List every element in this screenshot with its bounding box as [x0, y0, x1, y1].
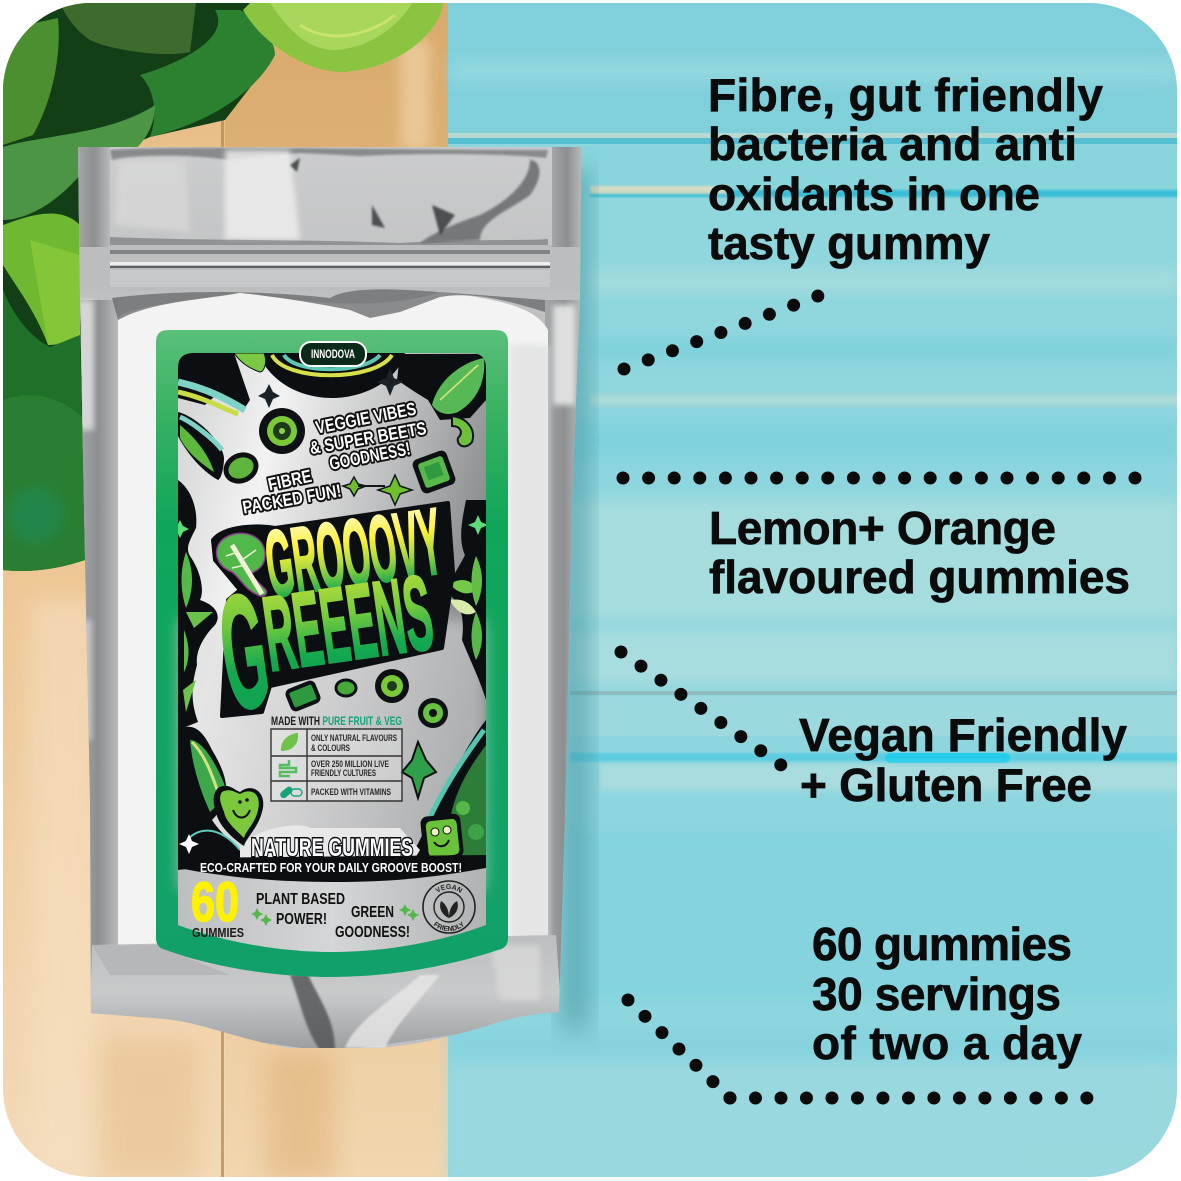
nature gummies title: NATURE GUMMIES	[251, 834, 413, 862]
tagline: veggie vibes: GOODNESS!	[328, 438, 412, 474]
green label	[156, 330, 508, 977]
tagline: veggie vibes: & SUPER BEETS	[308, 418, 428, 458]
sixty gummies count: GUMMIES	[192, 925, 244, 940]
vegan friendly seal: VEGAN	[434, 884, 463, 893]
callout 2: flavour: flavoured gummies	[709, 551, 1130, 603]
right decorative border art	[397, 354, 490, 868]
callout 1: fibre: Fibre, gut friendly	[708, 69, 1103, 121]
leaves photo	[3, 3, 443, 571]
green goodness: GREEN	[351, 904, 394, 921]
icon: leafy green	[217, 533, 266, 596]
dotted line 2	[623, 472, 1136, 484]
plant based power: POWER!	[276, 911, 327, 928]
brand badge	[300, 342, 366, 366]
teal wood planks background	[448, 3, 1181, 1180]
callout 4: servings: 30 servings	[812, 968, 1061, 1020]
panel: photo background: REEENS	[257, 554, 440, 694]
wood planks background	[3, 3, 448, 1180]
icons row under the name	[286, 669, 448, 728]
green goodness	[335, 904, 419, 941]
tagline: veggie vibes: VEGGIE VIBES	[314, 399, 418, 438]
inner foil label	[171, 353, 490, 952]
icon: sparkles green	[343, 475, 412, 505]
callout 1: fibre: oxidants in one	[708, 168, 1040, 220]
gummy heart character	[214, 786, 263, 846]
top swirl art	[234, 353, 405, 398]
gummy cube character	[420, 814, 464, 856]
product name: G	[210, 559, 278, 745]
bottom black rounded band of characters	[240, 825, 420, 858]
dotted arrow 1	[624, 296, 818, 369]
benefits table: FRIENDLY CULTURES	[311, 768, 376, 778]
lower pouch sheen	[90, 935, 562, 1052]
plant based power	[251, 891, 345, 928]
brand badge: INNODOVA	[311, 347, 355, 361]
made with heading: MADE WITH PURE FRUIT & VEG	[271, 714, 402, 728]
sparkle icons	[258, 368, 403, 408]
green goodness: GOODNESS!	[335, 924, 410, 941]
pouch top header	[78, 147, 581, 245]
bag shadow	[560, 170, 590, 1030]
sixty gummies count: 60	[191, 870, 239, 933]
icon: cucumber slice	[259, 408, 305, 454]
callout 4: servings: of two a day	[812, 1017, 1082, 1069]
callout 1: fibre: tasty gummy	[708, 217, 990, 269]
tagline: fibre packed fun: PACKED FUN!	[241, 481, 343, 518]
black title backing	[213, 503, 453, 716]
callout 3: vegan: Vegan Friendly	[799, 709, 1127, 761]
dotted arrow 3	[621, 652, 781, 765]
callout 4: servings: 60 gummies	[812, 918, 1072, 970]
product pouch	[70, 140, 590, 1060]
benefits table	[271, 729, 402, 801]
callout 4: servings	[812, 918, 1082, 1069]
icon: gut	[280, 760, 296, 776]
pouch body	[70, 140, 590, 1060]
callout 3: vegan	[799, 709, 1127, 811]
icon: pills	[280, 786, 303, 798]
callout 1: fibre: bacteria and anti	[708, 118, 1077, 170]
product name	[211, 501, 455, 718]
plant based power: PLANT BASED	[256, 891, 345, 908]
tagline: fibre packed fun: FIBRE	[266, 466, 313, 494]
side seals	[78, 147, 110, 247]
tagline: veggie vibes	[308, 399, 428, 474]
small swirl gummy	[452, 416, 473, 446]
strapline: ECO-CRAFTED FOR YOUR DAILY GROOVE BOOST!	[200, 860, 462, 875]
vegan friendly seal: FRIENDLY	[434, 921, 464, 932]
icon: green gummy	[224, 452, 258, 484]
callout 2: flavour: Lemon+ Orange	[709, 502, 1056, 554]
tagline: fibre packed fun	[241, 466, 343, 518]
benefits table: OVER 250 MILLION LIVE	[311, 759, 389, 769]
callout 2: flavour	[709, 502, 1130, 603]
dotted arrow 4	[628, 1000, 1087, 1098]
benefits table: ONLY NATURAL FLAVOURS	[311, 733, 397, 743]
zipper	[78, 245, 581, 291]
icon: leaf	[281, 733, 298, 751]
left decorative border art	[171, 353, 250, 870]
panel: photo background: GROOOVY	[259, 488, 448, 617]
vegan friendly seal	[422, 880, 476, 934]
callout 3: vegan: + Gluten Free	[800, 759, 1092, 811]
callout 1: fibre	[708, 69, 1103, 269]
black band	[178, 855, 486, 882]
benefits table: PACKED WITH VITAMINS	[311, 787, 391, 797]
icon: cube gummy	[412, 450, 456, 494]
inner pouch panel	[118, 292, 548, 990]
benefits table: & COLOURS	[311, 743, 350, 753]
